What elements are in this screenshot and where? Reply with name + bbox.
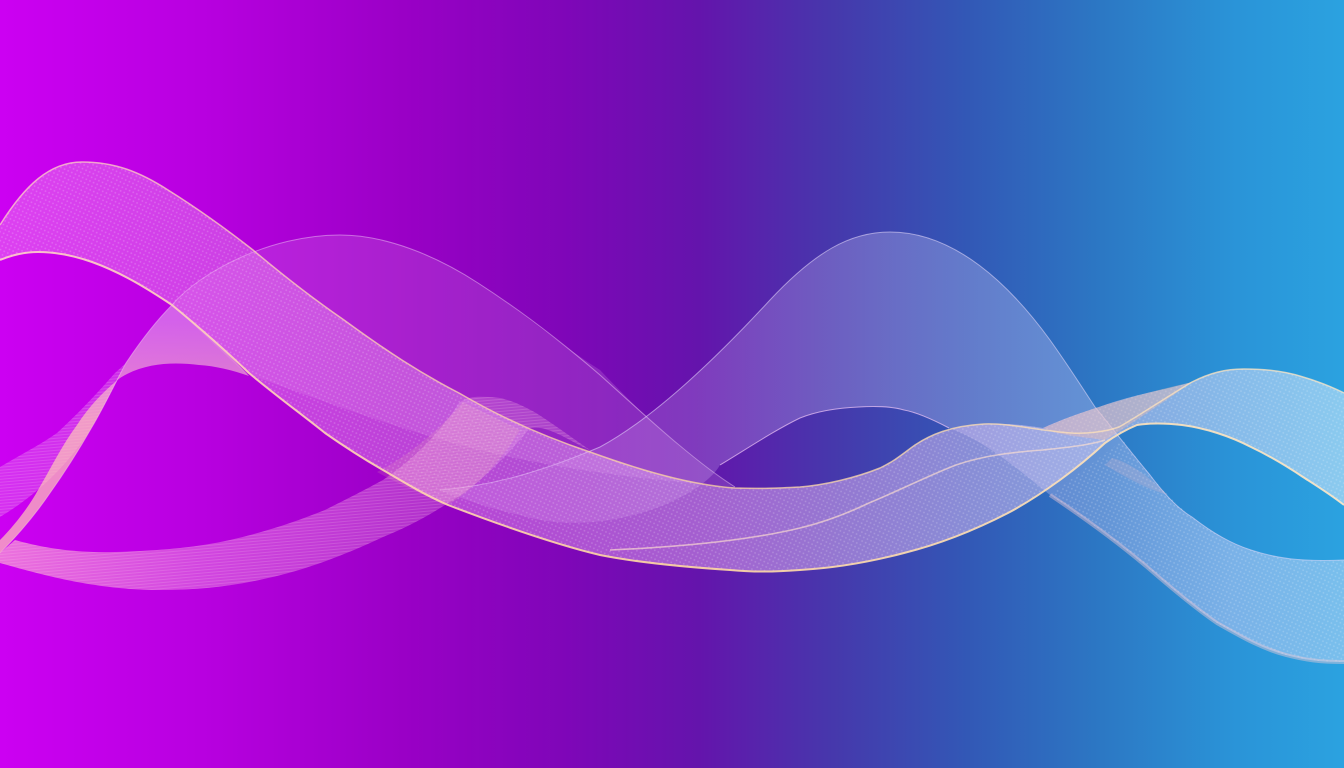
ribbon overlap: peach crossing (377, 402, 520, 505)
ribbon edge: top (0, 162, 1344, 488)
ribbon edge: bottom (0, 252, 1344, 572)
ribbon twist: peach fold (1043, 382, 1192, 440)
ribbon crotch: pink fold (0, 305, 249, 553)
ribbon fold highlight (610, 440, 1105, 550)
ribbon: faint right arch (440, 232, 1344, 662)
ribbon: faint left arch (0, 235, 735, 553)
ribbon: far left mesh band (0, 363, 126, 517)
ribbon: lower left band (0, 397, 590, 590)
ribbon: main mesh band (0, 162, 1344, 572)
